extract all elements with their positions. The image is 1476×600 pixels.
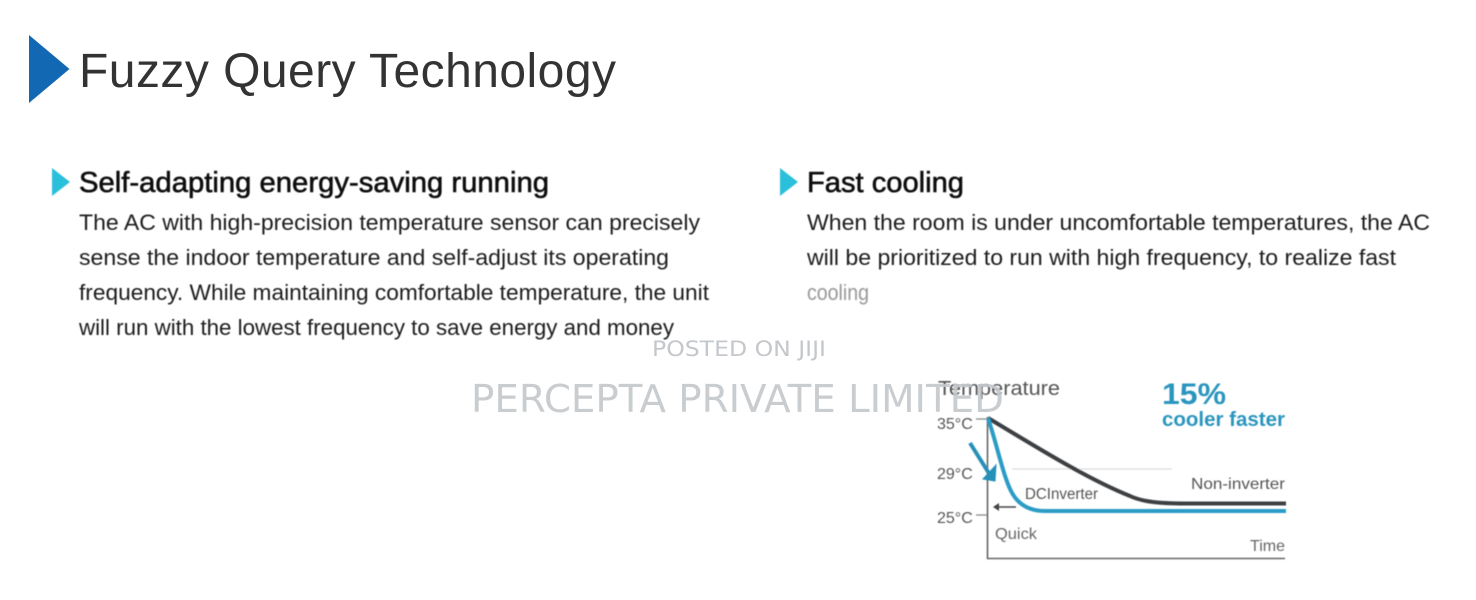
text block: self-adapting description: The AC with high-precision temperature sensor can precisely	[79, 210, 700, 235]
text block: self-adapting description: frequency. While maintaining comfortable temperature, the unit	[79, 280, 709, 305]
chart: temperature over time	[937, 378, 1286, 558]
watermark: percepta private limited: PERCEPTA PRIVATE LIMITED	[471, 377, 1004, 421]
text block: self-adapting description: will run with the lowest frequency to save energy and money	[78, 315, 674, 340]
icon: title arrow	[29, 35, 70, 103]
y axis labels	[937, 416, 973, 527]
callout: 15% cooler faster: 15%	[1162, 378, 1226, 411]
callout: 15% cooler faster: cooler faster	[1162, 408, 1285, 431]
arrow: quick	[993, 503, 1016, 511]
text block: fast cooling description: When the room is under uncomfortable temperatures, the AC	[807, 210, 1430, 235]
chart axes	[988, 417, 1285, 558]
y axis labels: 35°C	[937, 416, 973, 433]
title: Fuzzy Query Technology	[79, 45, 616, 98]
y axis labels: 29°C	[937, 466, 973, 483]
heading: self-adapting: Self-adapting energy-saving running	[79, 167, 549, 199]
icon: right section arrow	[780, 168, 798, 196]
panel: self-adapting energy-saving running	[52, 167, 709, 340]
text block: self-adapting description: sense the indoor temperature and self-adjust its operating	[79, 245, 669, 270]
icon: left section arrow	[52, 168, 70, 196]
label: non-inverter: Non-inverter	[1191, 476, 1286, 493]
heading: fast cooling: Fast cooling	[807, 167, 964, 199]
text block: fast cooling description: cooling	[807, 280, 869, 305]
line: non-inverter	[988, 418, 1286, 504]
text block: fast cooling description	[806, 210, 1430, 305]
watermark: posted on jiji: POSTED ON JIJI	[652, 337, 826, 361]
line: DC inverter	[988, 418, 1286, 511]
callout: 15% cooler faster	[1162, 378, 1285, 431]
axis title: temperature: Temperature	[938, 378, 1060, 400]
text block: self-adapting description	[78, 210, 709, 340]
y axis labels: 25°C	[937, 510, 973, 527]
label: quick: Quick	[995, 526, 1038, 543]
panel: fast cooling	[780, 167, 1430, 305]
text block: fast cooling description: will be prioritized to run with high frequency, to realize fast	[806, 245, 1396, 270]
label: DC inverter: DCInverter	[1025, 486, 1098, 503]
label: time: Time	[1250, 538, 1285, 555]
arrow: quick drop	[970, 443, 996, 481]
